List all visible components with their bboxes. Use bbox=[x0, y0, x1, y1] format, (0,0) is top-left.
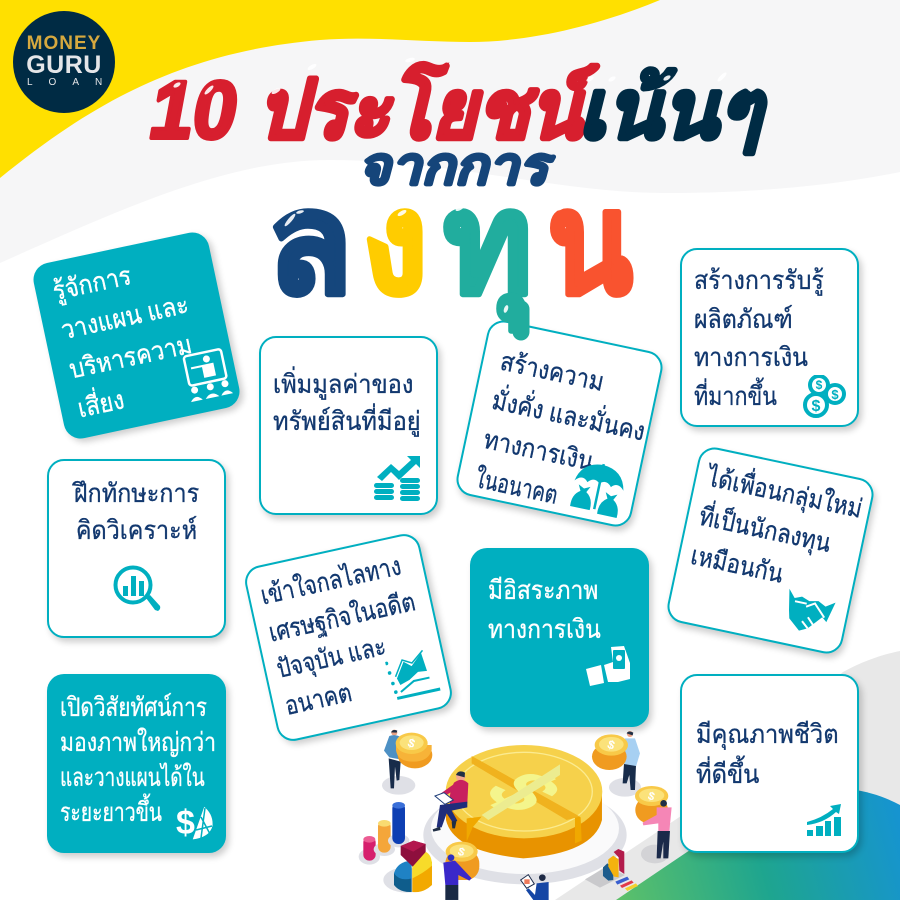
card: investor friends: เหมือนกัน bbox=[688, 540, 786, 589]
card: financial freedom: ทางการเงิน bbox=[488, 614, 601, 644]
pie chart bbox=[383, 841, 432, 893]
card: financial product awareness: ผลิตภัณฑ์ bbox=[694, 304, 793, 334]
icon: umbrella and money bags bbox=[570, 464, 624, 518]
title: น bbox=[548, 165, 632, 322]
title: เน้นๆ bbox=[578, 65, 767, 156]
icon: line chart bbox=[385, 650, 440, 700]
card: investor friends: ได้เพื่อนกลุ่มใหม่ bbox=[704, 462, 865, 524]
card: financial product awareness bbox=[680, 248, 859, 427]
card: future wealth and stability: มั่งคั่ง และมั่นคง bbox=[489, 385, 648, 447]
card: increase asset value: เพิ่มมูลค่าของ bbox=[273, 369, 413, 399]
card: understanding economic mechanisms: ปัจจุบัน และ bbox=[274, 631, 389, 684]
card: analytical thinking: ฝึกทักษะการ bbox=[74, 478, 199, 508]
card: broader vision: ระยะยาวขึ้น bbox=[60, 797, 162, 827]
title: ทุ bbox=[444, 165, 532, 331]
icon: dollar coins: $ bbox=[831, 387, 839, 402]
title: จากการ bbox=[358, 138, 555, 196]
icon: coins and rising arrow bbox=[374, 456, 420, 501]
card: broader vision: และวางแผนได้ใน bbox=[60, 762, 205, 792]
bar cylinders bbox=[359, 802, 409, 865]
card: financial freedom bbox=[470, 548, 649, 727]
platform bbox=[423, 783, 627, 884]
card: financial product awareness: ทางการเงิน bbox=[694, 342, 808, 372]
icon: presentation bbox=[182, 348, 233, 402]
logo: LOAN bbox=[27, 77, 118, 88]
card: understanding economic mechanisms bbox=[242, 531, 455, 744]
card: financial product awareness: ที่มากขึ้น bbox=[694, 380, 777, 410]
card: risk planning: บริหารความ bbox=[67, 329, 195, 384]
card: better quality of life bbox=[680, 674, 859, 853]
card: understanding economic mechanisms: เศรษฐกิจในอดีต bbox=[266, 586, 418, 647]
small bar chart on road bbox=[585, 849, 638, 891]
icon: rising bars bbox=[807, 804, 841, 836]
card: investor friends: ที่เป็นนักลงทุน bbox=[696, 501, 833, 558]
card: financial product awareness: สร้างการรับรู้ bbox=[694, 265, 824, 295]
title: ง bbox=[363, 165, 427, 322]
icon: handshake bbox=[789, 588, 836, 631]
card: future wealth and stability: สร้างความ bbox=[498, 346, 607, 397]
person with tablet at bottom bbox=[521, 874, 549, 900]
card: better quality of life: มีคุณภาพชีวิต bbox=[696, 719, 839, 749]
card: risk planning: วางแผน และ bbox=[58, 288, 191, 345]
card: risk planning bbox=[30, 229, 243, 441]
card: increase asset value: ทรัพย์สินที่มีอยู่ bbox=[273, 406, 421, 436]
title bbox=[149, 60, 768, 340]
giant coin bbox=[446, 745, 602, 858]
icon: dollar coins: $ bbox=[816, 378, 823, 392]
card: broader vision bbox=[47, 674, 226, 853]
card: broader vision: มองภาพใหญ่กว่า bbox=[60, 727, 216, 757]
card: analytical thinking: คิดวิเคราะห์ bbox=[76, 515, 197, 545]
person holding coins top left bbox=[382, 730, 432, 795]
logo: MONEY bbox=[27, 33, 101, 54]
icon: dollar coins bbox=[803, 375, 846, 418]
card: understanding economic mechanisms: เข้าใจกลไลทาง bbox=[258, 550, 404, 610]
logo: GURU bbox=[26, 51, 102, 79]
person in pink holding coins: $ bbox=[646, 790, 657, 804]
icon: dollar and globe: $ bbox=[176, 804, 195, 842]
icon: dollar coins: $ bbox=[812, 398, 821, 415]
icon: dollar and globe bbox=[176, 804, 213, 842]
card: increase asset value bbox=[259, 336, 438, 515]
title: 10 ประโยชน์ bbox=[150, 62, 600, 156]
person in pink holding coins bbox=[635, 786, 672, 863]
card: broader vision: เปิดวิสัยทัศน์การ bbox=[60, 692, 207, 722]
card: future wealth and stability: ทางการเงิน bbox=[481, 424, 596, 477]
person holding coins top right bbox=[592, 731, 641, 797]
logo bbox=[13, 11, 115, 113]
giant coin: $ bbox=[464, 761, 584, 822]
person in purple with coins bbox=[443, 842, 479, 900]
card: future wealth and stability bbox=[453, 317, 666, 530]
card: better quality of life: ที่ดีขึ้น bbox=[696, 759, 759, 789]
icon: magnifier with chart bbox=[114, 566, 160, 611]
person holding coins top left: $ bbox=[406, 736, 417, 751]
person in purple with coins: $ bbox=[456, 846, 467, 860]
card: risk planning: รู้จักการ bbox=[50, 260, 134, 306]
card: financial freedom: มีอิสระภาพ bbox=[488, 575, 598, 605]
card: analytical thinking bbox=[47, 459, 226, 638]
title: ล bbox=[268, 165, 352, 322]
card: risk planning: เสี่ยง bbox=[75, 384, 127, 423]
card: understanding economic mechanisms: อนาคต bbox=[282, 677, 354, 720]
card: investor friends bbox=[664, 444, 876, 657]
card: future wealth and stability: ในอนาคต bbox=[473, 463, 561, 510]
person with tablet on coin bbox=[433, 771, 468, 832]
icon: hand holding money bbox=[586, 646, 630, 686]
person holding coins top right: $ bbox=[606, 737, 617, 753]
